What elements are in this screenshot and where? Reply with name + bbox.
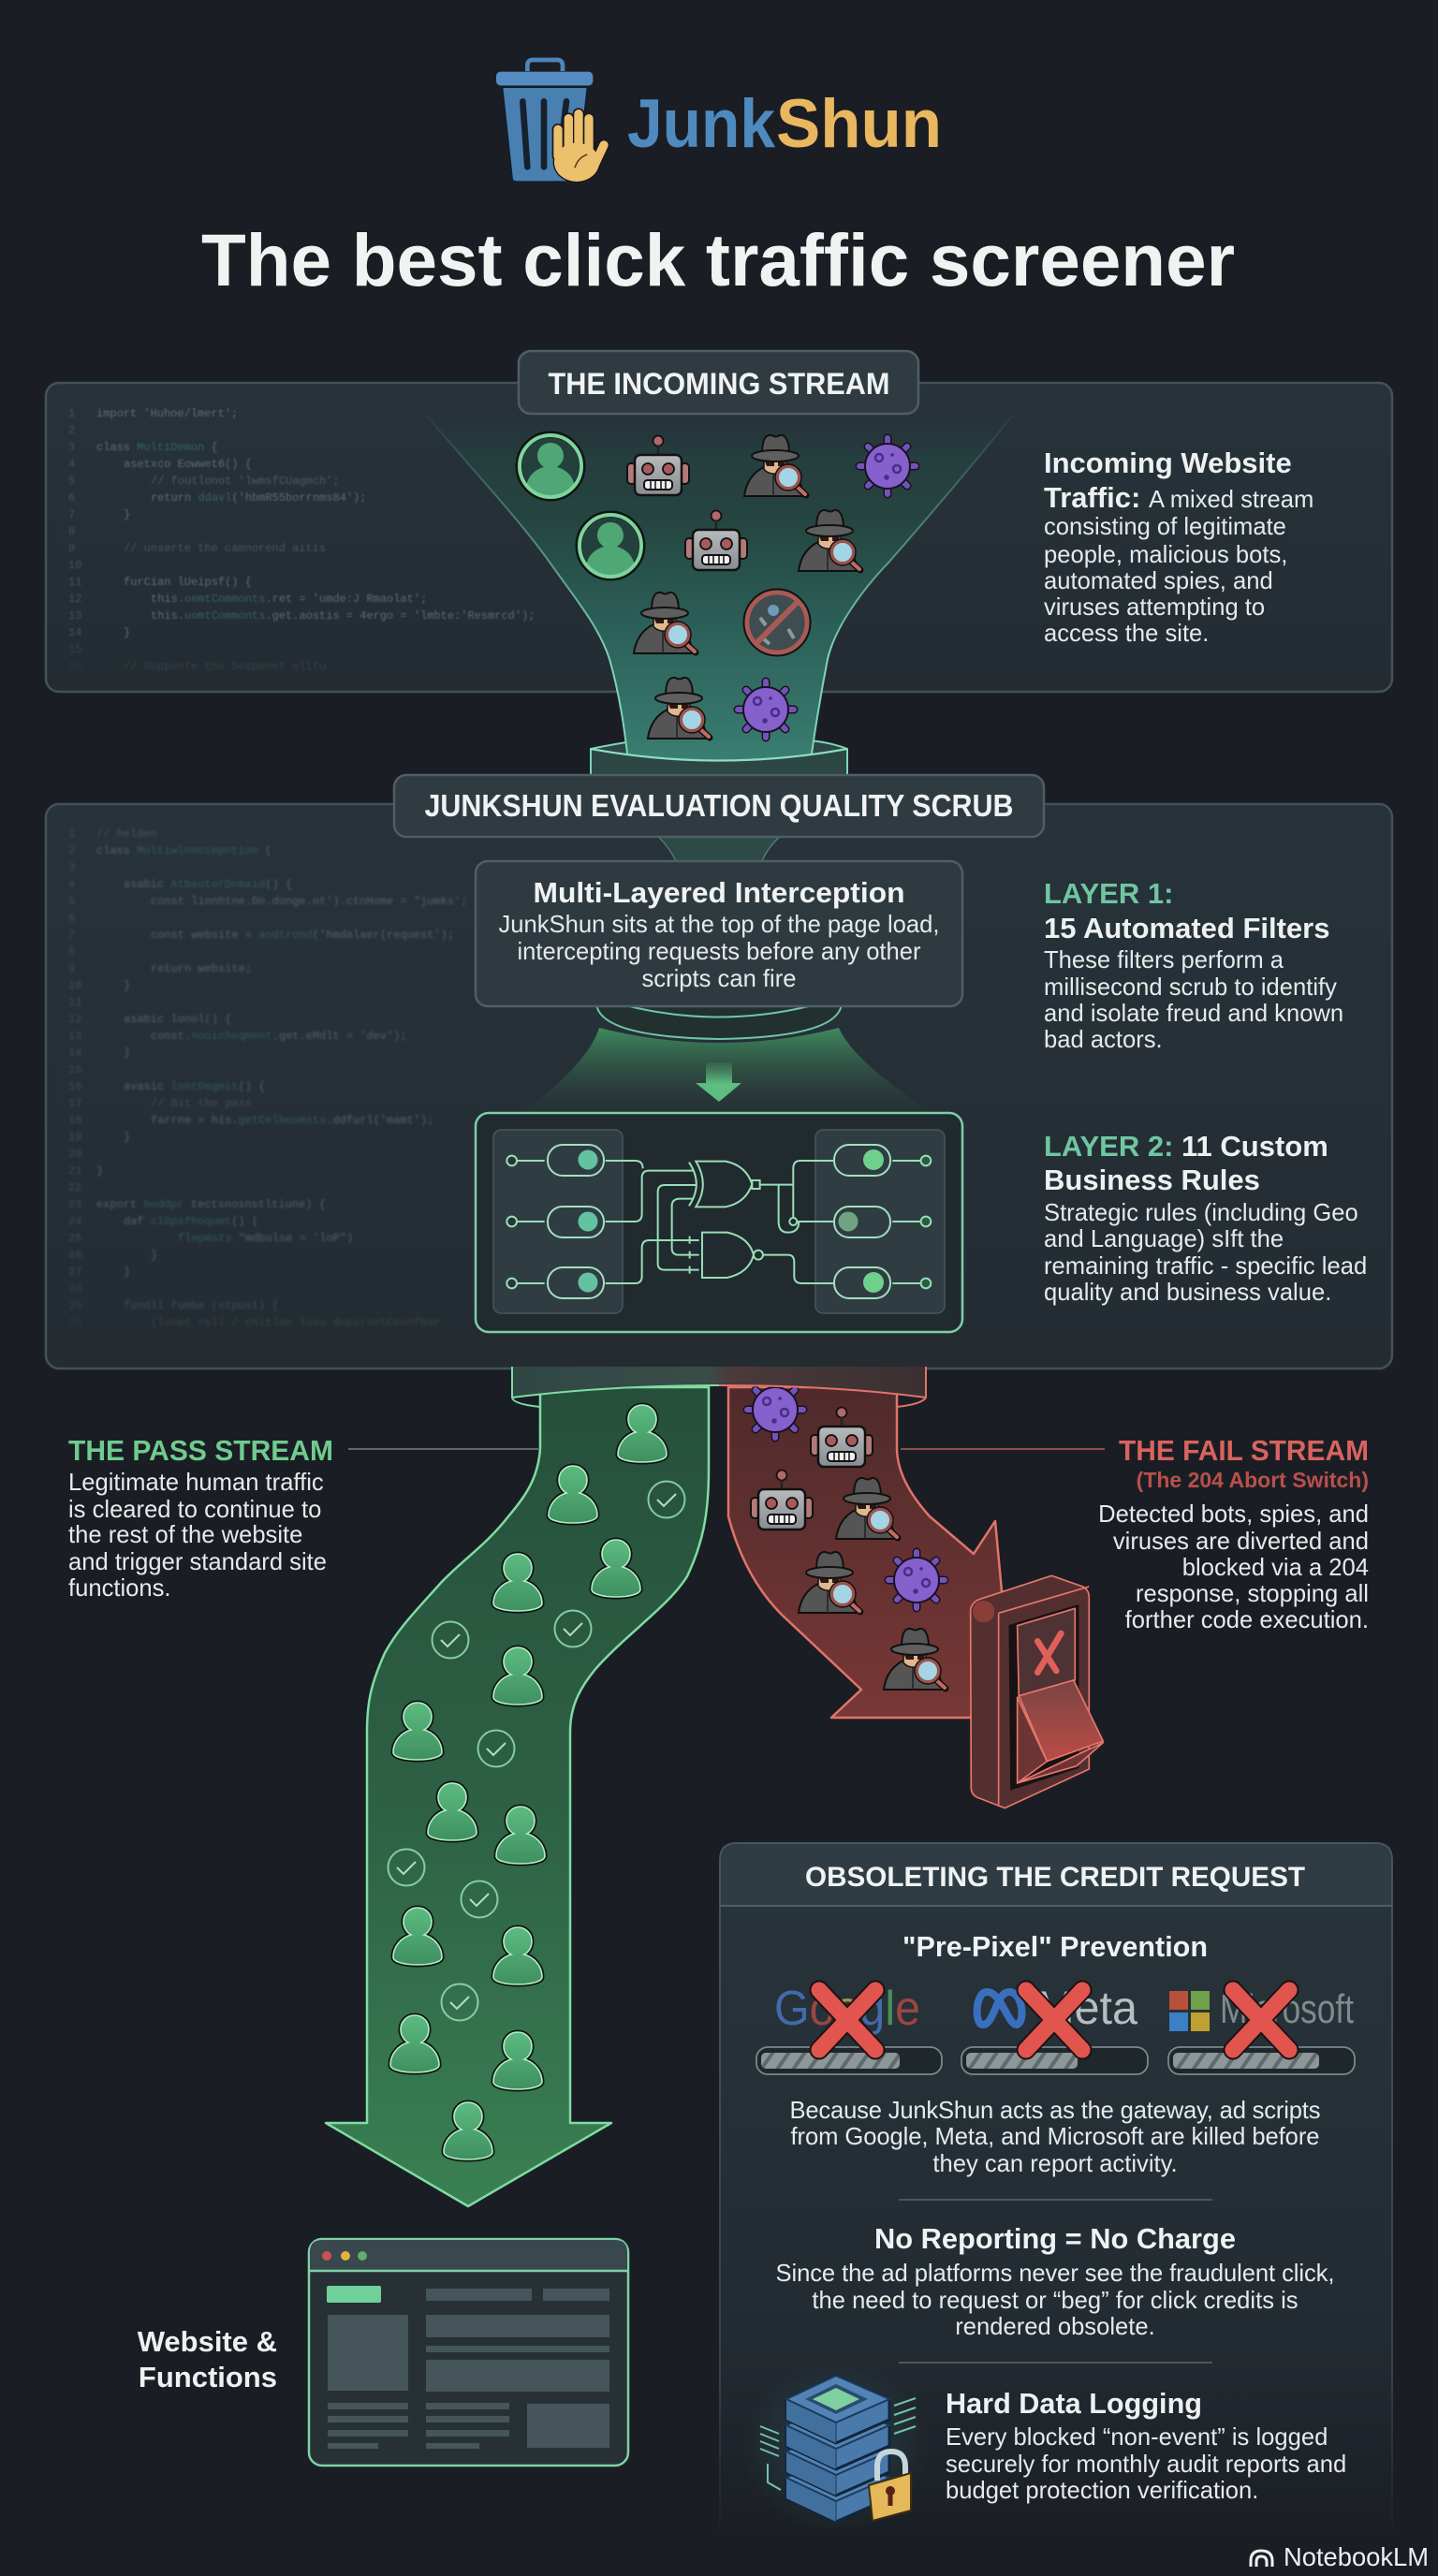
logo: meta: [977, 1982, 1137, 2034]
code backdrop: 18: [68, 1114, 81, 1127]
text block: layer 2: and Language) sIft the: [1044, 1226, 1284, 1252]
code backdrop: 17: [68, 1097, 81, 1110]
people: [390, 1405, 667, 2159]
text block: layer 1: bad actors.: [1044, 1027, 1163, 1053]
arrow: fail stream: [728, 1382, 1002, 1718]
text block: pass stream: THE PASS STREAM: [68, 1434, 333, 1467]
diagram: logic gates and toggles: [476, 1113, 962, 1332]
code backdrop: 2: [68, 844, 75, 857]
label: website and functions: Functions: [139, 2361, 277, 2393]
text block: hard data logging: budget protection verification.: [946, 2478, 1258, 2504]
text block: pass stream: Legitimate human traffic: [68, 1470, 324, 1496]
text block: pass stream: is cleared to continue to: [68, 1497, 321, 1523]
code backdrop: }: [124, 979, 130, 992]
callout: multi-layered interception: scripts can fire: [642, 966, 796, 992]
funnel: [426, 415, 1013, 777]
text block: incoming website traffic: Traffic: A mixed stream: [1044, 481, 1313, 514]
threats: [747, 1382, 946, 1690]
code backdrop: 5: [68, 475, 75, 488]
code backdrop: // foutlonot 'lwmsfCUagmch';: [151, 475, 340, 488]
code backdrop: const.nouicheqment.get.eMdlt = 'dev');: [151, 1030, 407, 1043]
text block: layer 1: 15 Automated Filters: [1044, 912, 1329, 944]
code backdrop: 10: [68, 979, 81, 992]
code backdrop: const lionhtne.Dn.donge.ot').ctnHome = "jumks';: [151, 895, 467, 908]
funnel neck: [591, 739, 847, 777]
code backdrop: class MultiDemon {: [96, 441, 218, 454]
text block: layer 2: remaining traffic - specific lead: [1044, 1253, 1367, 1280]
arrow: [696, 1062, 741, 1102]
text block: pass stream: and trigger standard site: [68, 1549, 327, 1575]
text block: incoming website traffic: access the site.: [1044, 621, 1209, 647]
code backdrop: 6: [68, 491, 75, 505]
text block: no reporting no charge: the need to request or “beg” for click credits is: [812, 2288, 1299, 2314]
code backdrop: // Suppunte the Seepenet elitu: [124, 660, 326, 673]
text block: fail stream: THE FAIL STREAM: [1119, 1434, 1369, 1467]
panel: evaluation quality scrub: [46, 804, 1392, 1368]
toggles: [548, 1145, 890, 1298]
icon: website window: [309, 2239, 628, 2466]
code backdrop: return website;: [151, 962, 252, 975]
text block: fail stream: blocked via a 204: [1182, 1555, 1369, 1581]
code backdrop: 5: [68, 895, 75, 908]
text block: no reporting no charge: Since the ad platforms never see the fraudulent click,: [775, 2261, 1335, 2287]
code backdrop: farrne = his.getCelboumsts.ddfurl('mamt');: [151, 1114, 433, 1127]
text block: layer 2: Strategic rules (including Geo: [1044, 1200, 1358, 1226]
code backdrop: 15: [68, 643, 81, 656]
logo: JunkShun: [496, 60, 942, 183]
text block: hard data logging: securely for monthly audit reports and: [946, 2452, 1346, 2478]
code backdrop: 8: [68, 945, 75, 959]
code backdrop: fundll fumbe (stpust) {: [124, 1299, 279, 1312]
text block: fail stream: Detected bots, spies, and: [1098, 1501, 1369, 1528]
text block: layer 2: Business Rules: [1044, 1164, 1260, 1196]
icon: trash can with stop hand: [496, 60, 604, 183]
code backdrop: // helden: [96, 827, 157, 841]
code backdrop: 16: [68, 1080, 81, 1093]
code backdrop: 7: [68, 508, 75, 521]
callout: multi-layered interception: [476, 861, 962, 1006]
code backdrop: }: [124, 508, 130, 521]
code backdrop: class Multiwlnoccepntion (: [96, 844, 271, 857]
code backdrop: 15: [68, 1063, 81, 1076]
text block: pass stream: functions.: [68, 1575, 171, 1602]
logo: JunkShun: Shun: [776, 86, 942, 162]
code backdrop: asabic AtbaotorDnmaid() {: [124, 878, 292, 891]
text block: layer 1: These filters perform a: [1044, 947, 1284, 973]
icon: server with padlock: [742, 2362, 930, 2534]
text block: fail stream: response, stopping all: [1136, 1581, 1369, 1607]
title: The best click traffic screener: [201, 218, 1235, 301]
text block: layer 1: millisecond scrub to identify: [1044, 974, 1337, 1001]
callout: multi-layered interception: JunkShun sits at the top of the page load,: [499, 912, 939, 938]
code backdrop: 1: [68, 407, 75, 420]
text block: pre-pixel description: they can report activity.: [932, 2151, 1178, 2177]
heading: junkshun evaluation quality scrub: JUNKSHUN EVALUATION QUALITY SCRUB: [425, 788, 1013, 823]
text block: hard data logging: Every blocked “non-event” is logged: [946, 2424, 1328, 2451]
text block: incoming website traffic: automated spies, and: [1044, 568, 1273, 594]
code backdrop: const website = andtrond('hmdalaer(request');: [151, 929, 454, 942]
watermark: NotebookLM: NotebookLM: [1284, 2542, 1429, 2571]
text block: pre-pixel description: from Google, Meta, and Microsoft are killed before: [790, 2124, 1320, 2150]
code backdrop: 14: [68, 626, 81, 639]
text block: no reporting no charge: [775, 2222, 1335, 2340]
text block: incoming website traffic: consisting of legitimate: [1044, 514, 1286, 540]
code backdrop: 4: [68, 878, 75, 891]
code backdrop: 7: [68, 929, 75, 942]
logo: microsoft: [1169, 1986, 1354, 2032]
text block: layer 2: [1044, 1130, 1367, 1306]
label: website and functions: [138, 2325, 277, 2393]
text block: layer 1: LAYER 1:: [1044, 877, 1173, 910]
code backdrop: asetxco Eowwet6() {: [124, 458, 252, 471]
text block: pass stream: the rest of the website: [68, 1522, 302, 1548]
text block: layer 1: and isolate freud and known: [1044, 1001, 1343, 1027]
text block: hard data logging: Hard Data Logging: [946, 2387, 1202, 2420]
splitter cylinder: [512, 1367, 926, 1407]
icon: prohibited sign: [746, 592, 808, 653]
logo: meta: Meta: [1036, 1982, 1137, 2034]
code backdrop: 20: [68, 1148, 81, 1161]
code backdrop: 30: [68, 1316, 81, 1329]
code backdrop: 11: [68, 996, 81, 1009]
code backdrop: 19: [68, 1131, 81, 1144]
code backdrop: // unserte the camnorend aitis: [124, 542, 326, 555]
code backdrop: 21: [68, 1164, 81, 1178]
code backdrop: // Bit the pass: [151, 1097, 252, 1110]
code backdrop: 13: [68, 609, 81, 622]
code backdrop: 25: [68, 1232, 81, 1245]
wires and gates: [506, 1156, 931, 1288]
code backdrop: asabic lonol() {: [124, 1013, 231, 1026]
code backdrop: 13: [68, 1030, 81, 1043]
code backdrop: 26: [68, 1249, 81, 1262]
text block: layer 2: LAYER 2: 11 Custom: [1044, 1130, 1328, 1163]
text block: no reporting no charge: No Reporting = No Charge: [874, 2222, 1236, 2255]
code backdrop: 11: [68, 576, 81, 589]
code backdrop: export hoddpr tectsnosnstltiune) {: [96, 1198, 326, 1211]
text block: incoming website traffic: people, malicious bots,: [1044, 542, 1287, 568]
code backdrop: [68, 827, 467, 1329]
arrow: pass stream: [326, 1387, 709, 2206]
code backdrop: import 'Huhoe/lmert';: [96, 407, 238, 420]
heading: the incoming stream: [519, 351, 918, 414]
text block: layer 1: [1044, 877, 1343, 1053]
callout: multi-layered interception: intercepting requests before any other: [517, 939, 921, 965]
code backdrop: }: [151, 1249, 157, 1262]
code backdrop: }: [124, 1131, 130, 1144]
code backdrop: daf clOpsfhoqumt() (: [124, 1215, 258, 1228]
code backdrop: 1: [68, 827, 75, 841]
code backdrop: }: [124, 626, 130, 639]
heading: junkshun evaluation quality scrub: [394, 775, 1044, 863]
text block: fail stream: viruses are diverted and: [1113, 1529, 1369, 1555]
text block: incoming website traffic: viruses attempting to: [1044, 594, 1265, 621]
code backdrop: 14: [68, 1046, 81, 1060]
check marks: [388, 1481, 685, 2020]
code backdrop: (lunet rell / chitlon lusu dopsrsntCeunfbar: [151, 1316, 441, 1329]
panel header: OBSOLETING THE CREDIT REQUEST: [805, 1862, 1305, 1893]
label: website and functions: Website &: [138, 2325, 277, 2358]
text block: pre-pixel description: Because JunkShun acts as the gateway, ad scripts: [790, 2098, 1320, 2124]
code backdrop: 6: [68, 912, 75, 925]
code backdrop: 3: [68, 441, 75, 454]
heading: pre-pixel prevention: "Pre-Pixel" Prevention: [902, 1930, 1208, 1963]
callout: multi-layered interception: Multi-Layered Interception: [534, 876, 904, 909]
code backdrop: }: [96, 1164, 103, 1178]
loading bars: [756, 2047, 1355, 2074]
code backdrop: 12: [68, 1013, 81, 1026]
text block: hard data logging: [946, 2387, 1346, 2504]
code backdrop: }: [124, 1046, 130, 1060]
text block: incoming website traffic: Incoming Website: [1044, 446, 1292, 479]
logo: google: Google: [774, 1982, 920, 2036]
text block: fail stream: (The 204 Abort Switch): [1137, 1468, 1369, 1492]
code backdrop: 22: [68, 1181, 81, 1194]
code backdrop: 23: [68, 1198, 81, 1211]
text block: fail stream: forther code execution.: [1125, 1607, 1369, 1633]
code backdrop: 10: [68, 559, 81, 572]
code backdrop: 9: [68, 962, 75, 975]
panel header: [720, 1844, 1392, 1906]
text block: pass stream: [68, 1434, 538, 1602]
code backdrop: 28: [68, 1282, 81, 1295]
code backdrop: 8: [68, 525, 75, 538]
icon: abort switch: [971, 1575, 1103, 1808]
code backdrop: 2: [68, 424, 75, 437]
code backdrop: 3: [68, 861, 75, 874]
code backdrop: [68, 407, 535, 673]
code backdrop: 27: [68, 1266, 81, 1279]
text block: fail stream: [901, 1434, 1369, 1633]
code backdrop: furCian lUeipsf() {: [124, 576, 252, 589]
red x marks: [819, 1990, 1289, 2050]
logo: microsoft: Microsoft: [1220, 1986, 1354, 2032]
code backdrop: }: [124, 1266, 130, 1279]
code backdrop: avasic lontDagmit() {: [124, 1080, 265, 1093]
code backdrop: 16: [68, 660, 81, 673]
icons: incoming traffic: [519, 434, 916, 739]
code backdrop: 4: [68, 458, 75, 471]
code backdrop: 9: [68, 542, 75, 555]
text block: layer 2: quality and business value.: [1044, 1280, 1331, 1306]
code backdrop: this.uomtCommonts.get.aostis = 4ergo = 'lmbte:'Resmrcd');: [151, 609, 535, 622]
wordmark: Junk: [627, 86, 775, 162]
code backdrop: 24: [68, 1215, 81, 1228]
text block: pre-pixel description: [790, 2098, 1320, 2177]
code backdrop: flepmsts "mdbulse = 'loP"): [178, 1232, 353, 1245]
heading: the incoming stream: THE INCOMING STREAM: [549, 367, 889, 401]
text block: incoming website traffic: [1044, 446, 1313, 647]
panel: incoming stream: [46, 383, 1392, 692]
code backdrop: this.oemtCommonts.ret = 'umde:J Rmaolat';: [151, 593, 427, 606]
code backdrop: 12: [68, 593, 81, 606]
panel: obsoleting the credit request: [720, 1843, 1392, 2546]
code backdrop: 29: [68, 1299, 81, 1312]
bowl and green flow to logic box: [522, 1003, 931, 1112]
text block: no reporting no charge: rendered obsolete.: [955, 2314, 1155, 2340]
code backdrop: return ddavl('hbmR55borrnms84');: [151, 491, 366, 505]
